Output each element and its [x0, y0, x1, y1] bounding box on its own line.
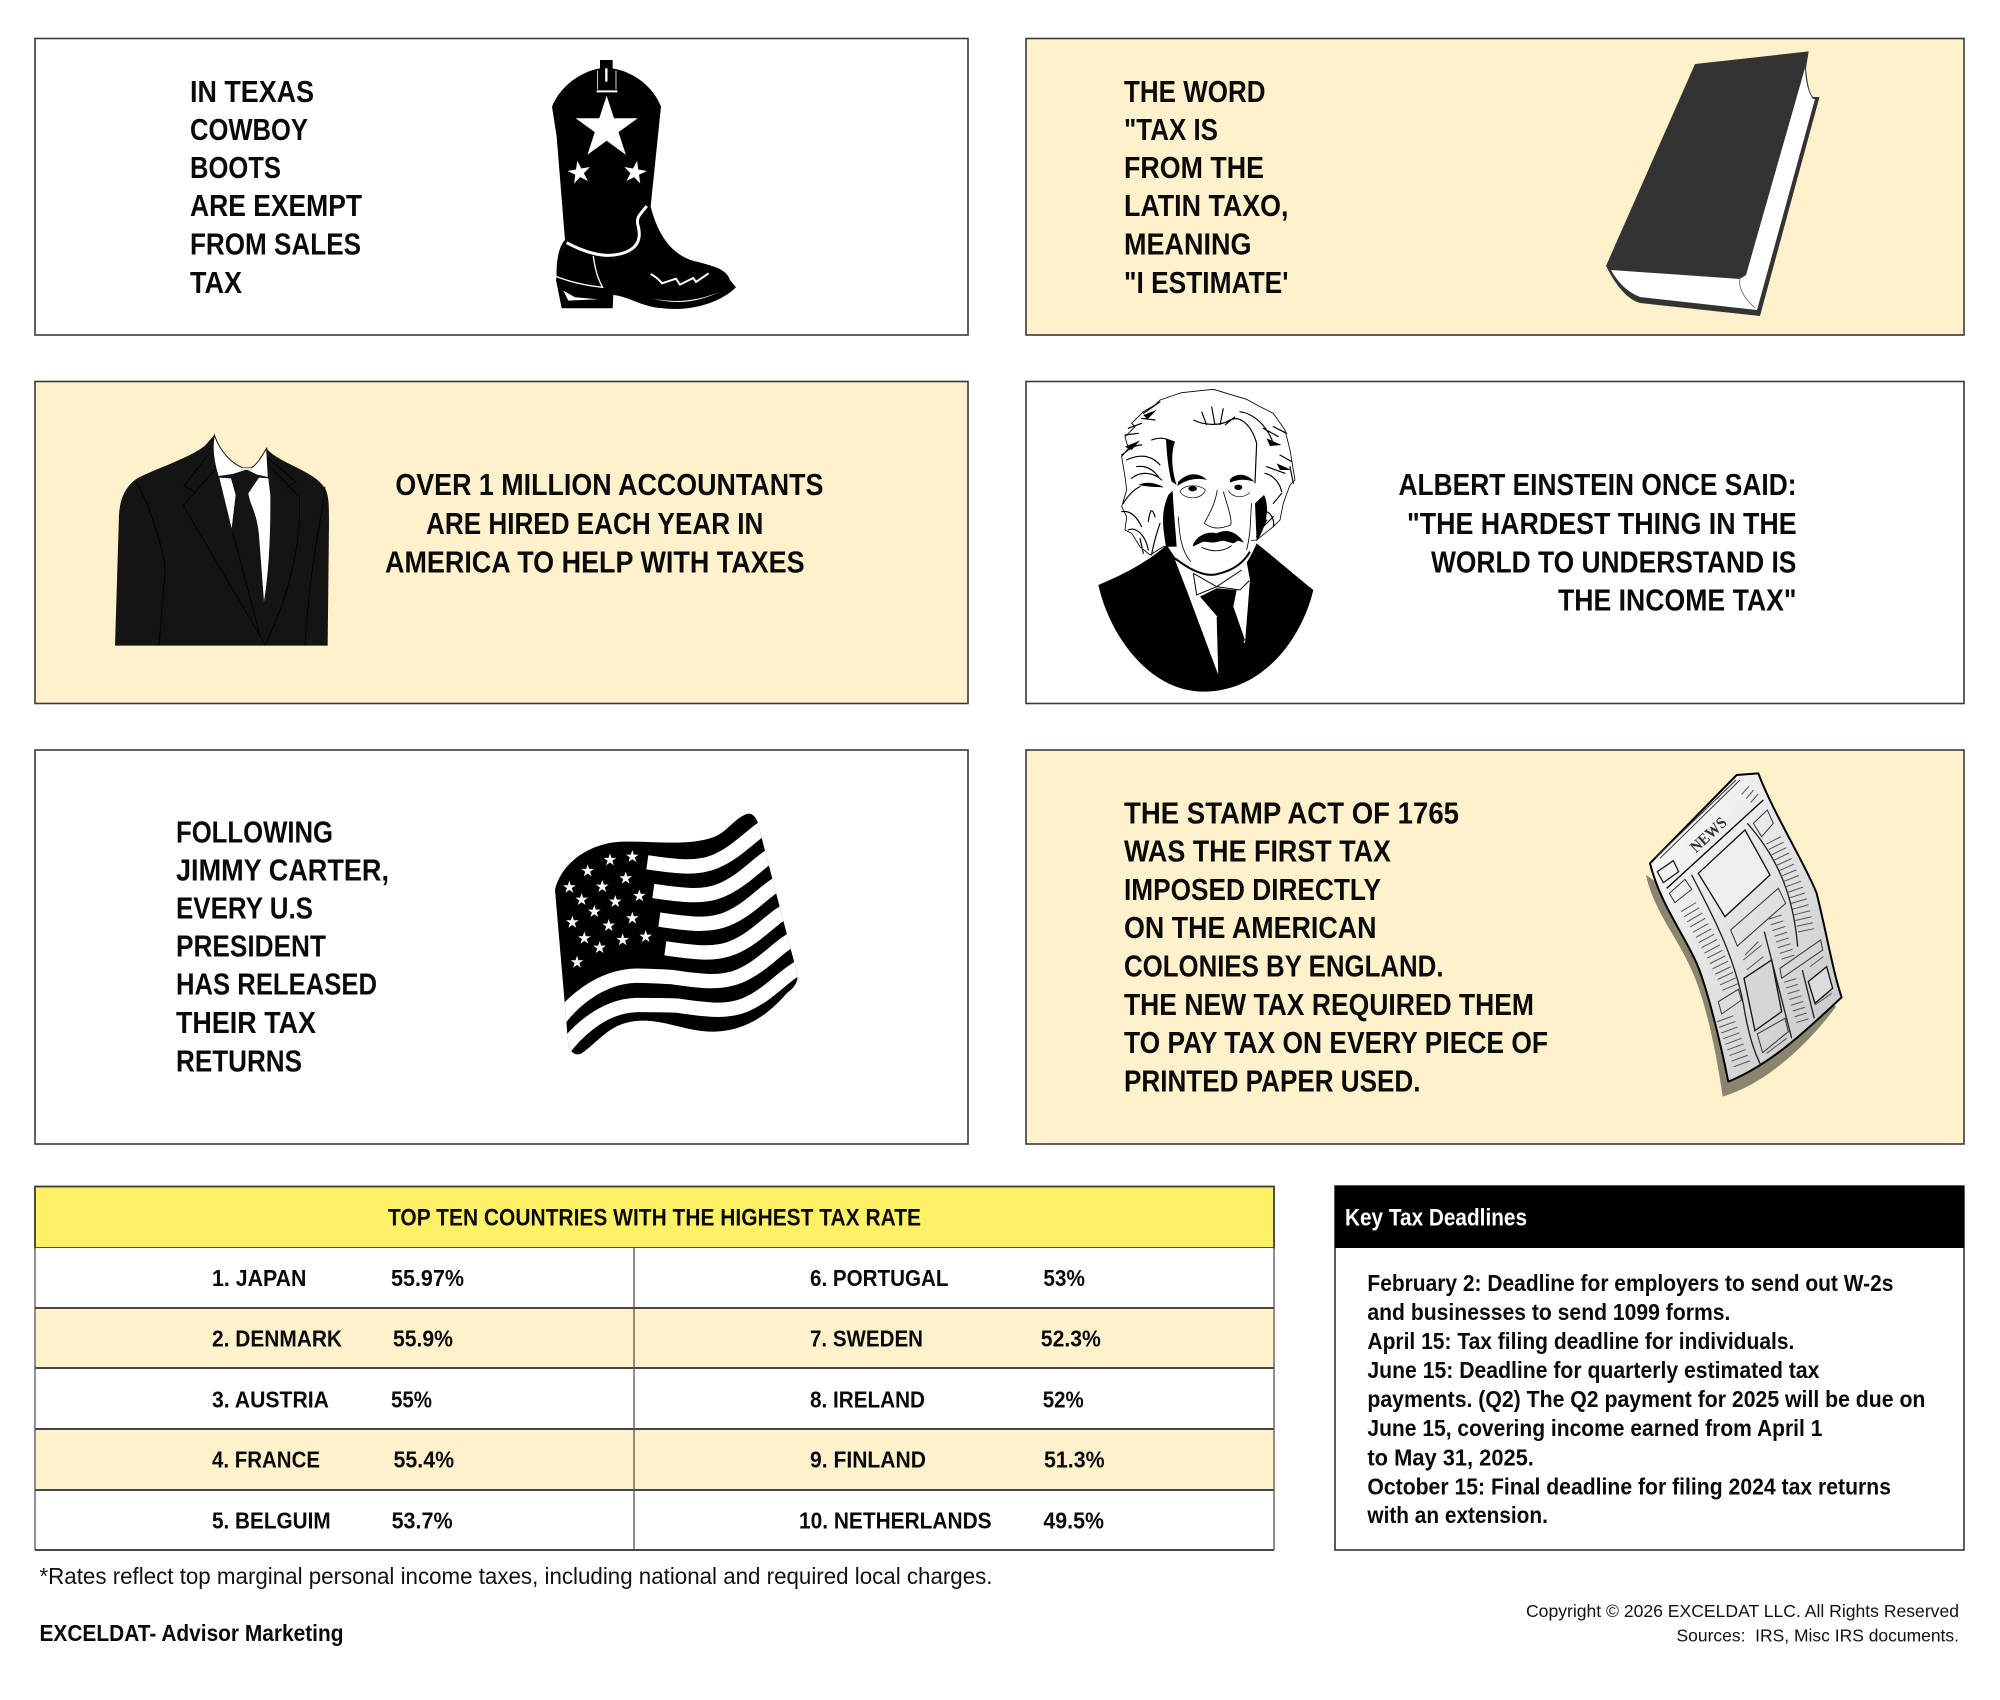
table rows: 9. FINLAND [810, 1446, 926, 1472]
text: Stamp Act: COLONIES BY ENGLAND. [1124, 949, 1444, 984]
text: Stamp Act: WAS THE FIRST TAX [1124, 834, 1391, 869]
text: accountants: OVER 1 MILLION ACCOUNTANTS [395, 467, 823, 502]
deadlines text: June 15, covering income earned from April 1 [1367, 1415, 1823, 1441]
brand line: EXCELDAT- Advisor Marketing [40, 1620, 344, 1646]
deadlines text: June 15: Deadline for quarterly estimated tax [1367, 1357, 1820, 1383]
table rows: 53.7% [392, 1507, 453, 1533]
icon: cowboy boot [552, 60, 736, 309]
text: Stamp Act: ON THE AMERICAN [1124, 910, 1376, 945]
text: accountants: ARE HIRED EACH YEAR IN [426, 506, 763, 541]
text: word origin: FROM THE [1124, 150, 1264, 185]
icon: suit jacket [115, 435, 329, 646]
table rows: 10. NETHERLANDS [799, 1507, 992, 1533]
table rows: 3. AUSTRIA [212, 1386, 329, 1412]
text: word origin: MEANING [1124, 226, 1252, 262]
deadlines text [1366, 1270, 1925, 1528]
deadlines text: with an extension. [1366, 1502, 1548, 1528]
text: cowboy boots [190, 74, 362, 300]
text: tax returns [176, 815, 389, 1079]
table rows: 7. SWEDEN [810, 1326, 923, 1352]
deadlines text: to May 31, 2025. [1367, 1444, 1534, 1470]
text: tax returns: EVERY U.S [176, 891, 313, 926]
text: word origin: THE WORD [1124, 74, 1266, 109]
text: tax returns: RETURNS [176, 1044, 302, 1079]
table rows: 55.97% [391, 1265, 464, 1291]
deadlines header: Key Tax Deadlines [1345, 1205, 1527, 1232]
text: cowboy boots: COWBOY [190, 112, 308, 147]
text: Stamp Act: THE NEW TAX REQUIRED THEM [1124, 987, 1534, 1022]
copyright and sources [1526, 1601, 1959, 1645]
icon: waving American flag [555, 814, 798, 1054]
text: tax returns: JIMMY CARTER, [176, 853, 389, 888]
icon: book [1606, 51, 1820, 316]
text: word origin: LATIN TAXO, [1124, 188, 1288, 223]
table header [35, 1186, 1274, 1248]
text: tax returns: HAS RELEASED [176, 967, 377, 1002]
panel: presidents tax returns fact [35, 750, 968, 1144]
text: accountants [385, 467, 823, 580]
table rows: 5. BELGUIM [212, 1507, 331, 1533]
text: Stamp Act: IMPOSED DIRECTLY [1124, 872, 1381, 907]
text: cowboy boots: ARE EXEMPT [190, 188, 362, 223]
icon: newspaper: NEWS [1687, 814, 1730, 856]
icon: newspaper [1646, 773, 1842, 1097]
table rows [35, 1248, 1274, 1550]
copyright and sources: Copyright © 2026 EXCELDAT LLC. All Rights Reserved [1526, 1601, 1959, 1621]
text: tax returns: FOLLOWING [176, 815, 333, 850]
text: cowboy boots: BOOTS [190, 150, 281, 185]
table rows: 52% [1043, 1386, 1084, 1412]
table rows: 2. DENMARK [212, 1326, 342, 1352]
text: Stamp Act: PRINTED PAPER USED. [1124, 1064, 1420, 1099]
deadlines text: February 2: Deadline for employers to send out W-2s [1367, 1270, 1893, 1296]
table rows: 6. PORTUGAL [810, 1265, 948, 1291]
panel: key tax deadlines [1335, 1186, 1964, 1550]
panel: accountants fact [35, 382, 968, 704]
deadlines text: and businesses to send 1099 forms. [1367, 1299, 1730, 1325]
panel: tax word origin fact [1026, 38, 1964, 335]
text: Stamp Act [1124, 795, 1548, 1099]
deadlines text: October 15: Final deadline for filing 2024 tax returns [1367, 1473, 1891, 1499]
text: word origin: "TAX IS [1124, 112, 1218, 147]
text: Einstein quote: "THE HARDEST THING IN THE [1407, 506, 1797, 541]
text: cowboy boots: TAX [190, 265, 242, 300]
text: tax returns: THEIR TAX [176, 1005, 316, 1040]
deadlines text: payments. (Q2) The Q2 payment for 2025 will be due on [1367, 1386, 1925, 1412]
panel: Einstein quote [1026, 382, 1964, 704]
text: word origin [1124, 74, 1288, 300]
table rows: 52.3% [1041, 1326, 1101, 1352]
text: accountants: AMERICA TO HELP WITH TAXES [385, 544, 805, 580]
table rows: 4. FRANCE [212, 1446, 320, 1472]
footnote: *Rates reflect top marginal personal income taxes, including national and required local charges. [40, 1563, 992, 1589]
table rows: 51.3% [1044, 1446, 1105, 1472]
text: cowboy boots: IN TEXAS [190, 74, 314, 109]
text: Einstein quote [1398, 467, 1797, 618]
text: Einstein quote: THE INCOME TAX" [1558, 582, 1796, 618]
table rows: 53% [1043, 1265, 1085, 1291]
icon: Einstein portrait [1098, 389, 1313, 692]
table rows: 8. IRELAND [810, 1386, 925, 1412]
table rows: 55.4% [394, 1446, 454, 1472]
table rows: 55% [391, 1386, 432, 1412]
text: Stamp Act: THE STAMP ACT OF 1765 [1124, 795, 1459, 830]
table header: TOP TEN COUNTRIES WITH THE HIGHEST TAX RATE [388, 1205, 921, 1232]
text: cowboy boots: FROM SALES [190, 226, 361, 262]
panel: cowboy boots fact [35, 38, 968, 335]
text: word origin: "I ESTIMATE' [1124, 265, 1288, 300]
table rows: 1. JAPAN [212, 1265, 306, 1291]
text: tax returns: PRESIDENT [176, 929, 326, 964]
text: Stamp Act: TO PAY TAX ON EVERY PIECE OF [1124, 1025, 1548, 1060]
text: Einstein quote: WORLD TO UNDERSTAND IS [1431, 544, 1796, 580]
copyright and sources: Sources: IRS, Misc IRS documents. [1676, 1625, 1959, 1645]
deadlines text: April 15: Tax filing deadline for individuals. [1367, 1328, 1794, 1354]
table rows: 55.9% [393, 1326, 453, 1352]
deadlines header [1335, 1186, 1964, 1248]
text: Einstein quote: ALBERT EINSTEIN ONCE SAID: [1398, 467, 1796, 502]
panel: Stamp Act fact [1026, 750, 1964, 1144]
panel: top ten countries table [35, 1186, 1274, 1550]
table rows: 49.5% [1043, 1507, 1104, 1533]
